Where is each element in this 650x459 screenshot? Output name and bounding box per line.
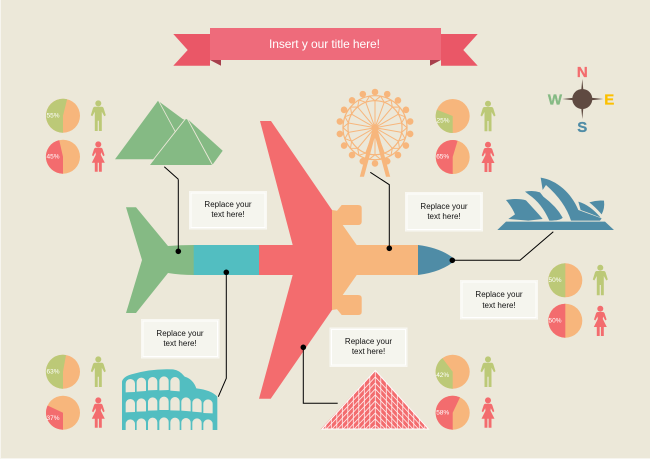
- title text: Insert y our title here!: [269, 37, 380, 51]
- text box: colosseum: Replace your: [156, 329, 204, 338]
- icon: colosseum: [122, 369, 217, 430]
- pie: women 65%: 65%: [436, 154, 449, 160]
- text box: louvre: [330, 328, 407, 366]
- text box: pyramids: [190, 192, 266, 229]
- pie: women 37%: 37%: [46, 415, 60, 422]
- compass: N: [577, 64, 588, 81]
- stats: top left: [46, 99, 106, 174]
- text box: louvre: text here!: [352, 347, 385, 356]
- icon: man: [480, 356, 496, 387]
- pie: men 25%: 25%: [436, 118, 450, 124]
- icon: pyramids: [115, 101, 223, 166]
- text box: ferris wheel: [406, 192, 482, 231]
- pie: women 58%: 58%: [436, 410, 449, 416]
- stats: right: [548, 263, 608, 338]
- airplane: [126, 121, 456, 399]
- text box: opera house: text here!: [482, 301, 516, 310]
- text box: louvre: Replace your: [345, 337, 392, 346]
- icon: man: [593, 265, 608, 295]
- compass: E: [604, 92, 614, 108]
- compass: [548, 64, 614, 136]
- stats: bottom right: [436, 355, 496, 430]
- icon: sydney opera house: [497, 178, 614, 230]
- text box: pyramids: text here!: [211, 210, 245, 219]
- icon: man: [480, 101, 496, 131]
- nose: [418, 245, 456, 275]
- connector: pyramids: [164, 167, 181, 254]
- icon: woman: [482, 397, 494, 428]
- pie: women 45%: 45%: [46, 154, 60, 161]
- pie: men 63%: 63%: [46, 369, 60, 376]
- stats: top right: [436, 99, 496, 174]
- text box: pyramids: Replace your: [204, 200, 252, 209]
- icon: woman: [482, 142, 494, 172]
- pie: men 50%: 50%: [548, 277, 562, 284]
- text box: colosseum: [142, 320, 219, 358]
- text box: opera house: [460, 280, 538, 319]
- pie: men 42%: 42%: [436, 372, 449, 379]
- red wings and fuselage: [259, 121, 332, 399]
- stats: bottom left: [46, 355, 106, 430]
- icon: man: [91, 356, 106, 387]
- icon: woman: [92, 141, 105, 172]
- icon: woman: [594, 306, 607, 336]
- text box: opera house: Replace your: [475, 290, 523, 299]
- connector: colosseum: [218, 270, 229, 397]
- connector: louvre: [300, 344, 338, 403]
- text box: colosseum: text here!: [163, 339, 197, 348]
- connector: opera house: [450, 232, 553, 263]
- compass: W: [548, 92, 563, 108]
- title banner: [173, 28, 478, 66]
- tail section: [126, 207, 194, 313]
- connector: ferris wheel: [370, 172, 392, 251]
- icon: ferris wheel: [335, 88, 415, 177]
- icon: louvre pyramid: [321, 370, 429, 429]
- compass: S: [577, 119, 587, 136]
- teal fuselage: [194, 245, 260, 275]
- pie: men 55%: 55%: [46, 113, 60, 120]
- pie: women 50%: 50%: [548, 318, 562, 324]
- text box: ferris wheel: text here!: [427, 212, 461, 221]
- text box: ferris wheel: Replace your: [420, 202, 468, 211]
- orange front and engines: [332, 205, 418, 315]
- icon: man: [91, 100, 106, 131]
- icon: woman: [92, 397, 105, 428]
